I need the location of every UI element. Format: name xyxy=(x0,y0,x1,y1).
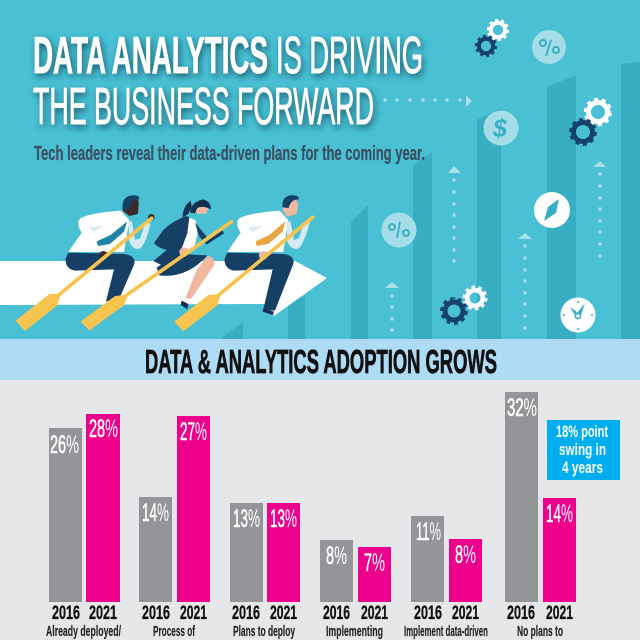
bar group: implementing: 2021 xyxy=(361,603,388,624)
icon: gears bottom xyxy=(442,287,486,323)
bar group: already deployed xyxy=(46,414,121,640)
bar group: no plans: 2021 xyxy=(546,603,573,624)
bar group: already deployed: 2016 xyxy=(52,603,80,624)
bar group: implementing xyxy=(320,540,391,640)
icon: clock xyxy=(560,298,596,332)
icon: percent middle xyxy=(382,212,416,248)
bar group: no plans xyxy=(505,392,576,640)
bar group: process of: 27% xyxy=(180,418,207,446)
dotted arrows: vertical xyxy=(385,161,606,332)
bar group: implement data-driven: 8% xyxy=(455,541,476,569)
title: IS DRIVING xyxy=(276,27,423,85)
dotted arrow: horizontal xyxy=(383,95,472,107)
bar group: implement data-driven: 2016 xyxy=(414,603,442,624)
oars xyxy=(16,217,313,331)
icon: compass xyxy=(534,192,570,228)
bar group: implement data-driven xyxy=(404,516,488,640)
bar group: process of: 2016 xyxy=(142,603,170,624)
icon: dollar: $ xyxy=(492,115,508,143)
white arrow xyxy=(0,261,327,316)
chart background xyxy=(0,380,640,640)
bar group: plans to deploy xyxy=(230,503,300,640)
bar group: implement data-driven: Implement data-driven xyxy=(404,623,488,640)
callout: 18% point swing: swing in xyxy=(559,440,606,459)
callout: 18% point swing: 18% point xyxy=(556,422,608,441)
title: DATA ANALYTICS xyxy=(33,27,268,85)
bar group: plans to deploy: 13% xyxy=(233,505,260,533)
bar group: plans to deploy: 2016 xyxy=(232,603,260,624)
icon: gears top xyxy=(476,20,508,56)
section band xyxy=(0,339,640,380)
bar group: process of: 14% xyxy=(142,499,169,527)
background bar chart xyxy=(220,62,640,339)
bar group: implement data-driven: 11% xyxy=(416,518,441,546)
bar group: no plans: 14% xyxy=(546,500,573,528)
bar group: already deployed: 28% xyxy=(89,415,118,443)
bar group: plans to deploy: 2021 xyxy=(270,603,297,624)
bar group: already deployed: 26% xyxy=(50,431,79,459)
rower 1 xyxy=(66,195,155,301)
rowers illustration xyxy=(16,195,313,331)
bar group: process of xyxy=(139,416,210,640)
bar group: plans to deploy: Plans to deploy xyxy=(233,623,295,640)
bar group: process of: Process of xyxy=(153,623,196,640)
hero background xyxy=(0,0,640,340)
icon: dollar xyxy=(484,110,518,146)
bar group: already deployed: 2021 xyxy=(89,603,117,624)
rower 2 xyxy=(153,199,224,309)
icon: gears middle xyxy=(571,99,611,144)
bar group: already deployed: Already deployed/ xyxy=(46,623,121,640)
title xyxy=(33,27,423,136)
bar group: implementing: 7% xyxy=(364,549,385,577)
icon: percent top xyxy=(532,30,566,64)
bar group: implementing: 8% xyxy=(326,542,347,570)
bar group: plans to deploy: 13% xyxy=(270,505,297,533)
bar group: no plans: 32% xyxy=(507,394,537,422)
subtitle: Tech leaders reveal their data-driven plans for the coming year. xyxy=(34,143,425,165)
bar group: process of: 2021 xyxy=(180,603,207,624)
bar group: no plans: No plans to xyxy=(517,623,563,640)
bar group: implementing: 2016 xyxy=(323,603,350,624)
bar group: implementing: Implementing xyxy=(326,623,383,640)
callout: 18% point swing xyxy=(547,420,620,480)
bar group: no plans: 2016 xyxy=(507,603,535,624)
callout: 18% point swing: 4 years xyxy=(562,458,603,477)
bar group: implement data-driven: 2021 xyxy=(452,603,479,624)
rower 3 xyxy=(225,195,310,315)
